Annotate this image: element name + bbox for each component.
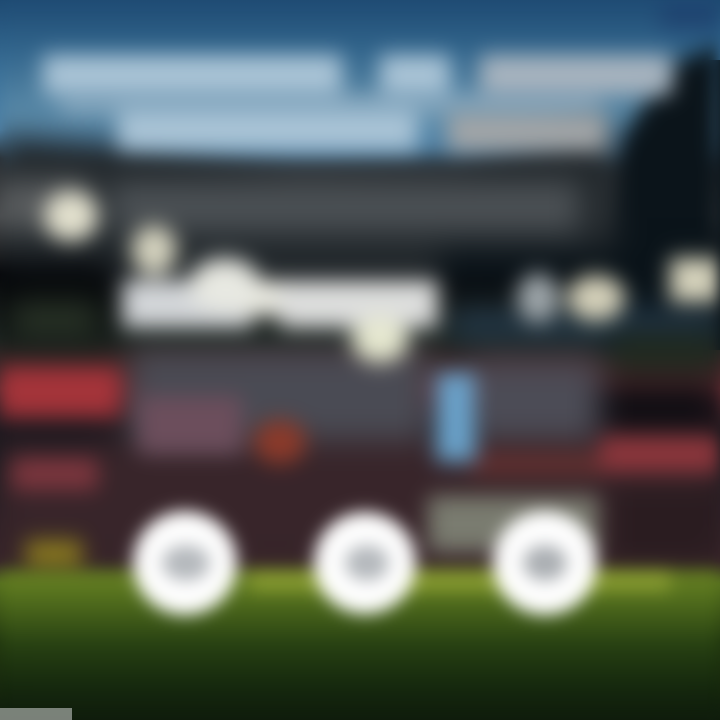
title: LOCAL bbox=[517, 57, 635, 95]
title: STADIUMS bbox=[179, 112, 355, 150]
advantage badge 3 bbox=[493, 511, 597, 615]
corner logo bbox=[0, 708, 72, 720]
red seating blocks bbox=[0, 368, 720, 568]
floodlights and bright stand panels bbox=[44, 191, 720, 363]
advantage badge 2: 02 bbox=[355, 551, 379, 576]
advantage badge 1 bbox=[133, 511, 237, 615]
pale tunnel block bbox=[428, 496, 598, 552]
title bbox=[43, 55, 672, 151]
blue glass panel bbox=[436, 372, 476, 462]
pitch bbox=[0, 570, 720, 720]
sky bbox=[0, 0, 720, 160]
seating rows bbox=[0, 300, 720, 560]
title: WORLD bbox=[463, 112, 591, 150]
title: ADVANTAGE bbox=[87, 57, 297, 95]
advantage badge 1: 01 bbox=[174, 551, 198, 576]
dark corner stand bbox=[600, 45, 720, 350]
stadium roof bbox=[0, 125, 720, 340]
advantage badge 2 bbox=[314, 512, 416, 614]
advantage badge 3: 03 bbox=[533, 551, 557, 576]
right edge dark stand bbox=[680, 60, 720, 350]
title: OF bbox=[391, 57, 439, 95]
